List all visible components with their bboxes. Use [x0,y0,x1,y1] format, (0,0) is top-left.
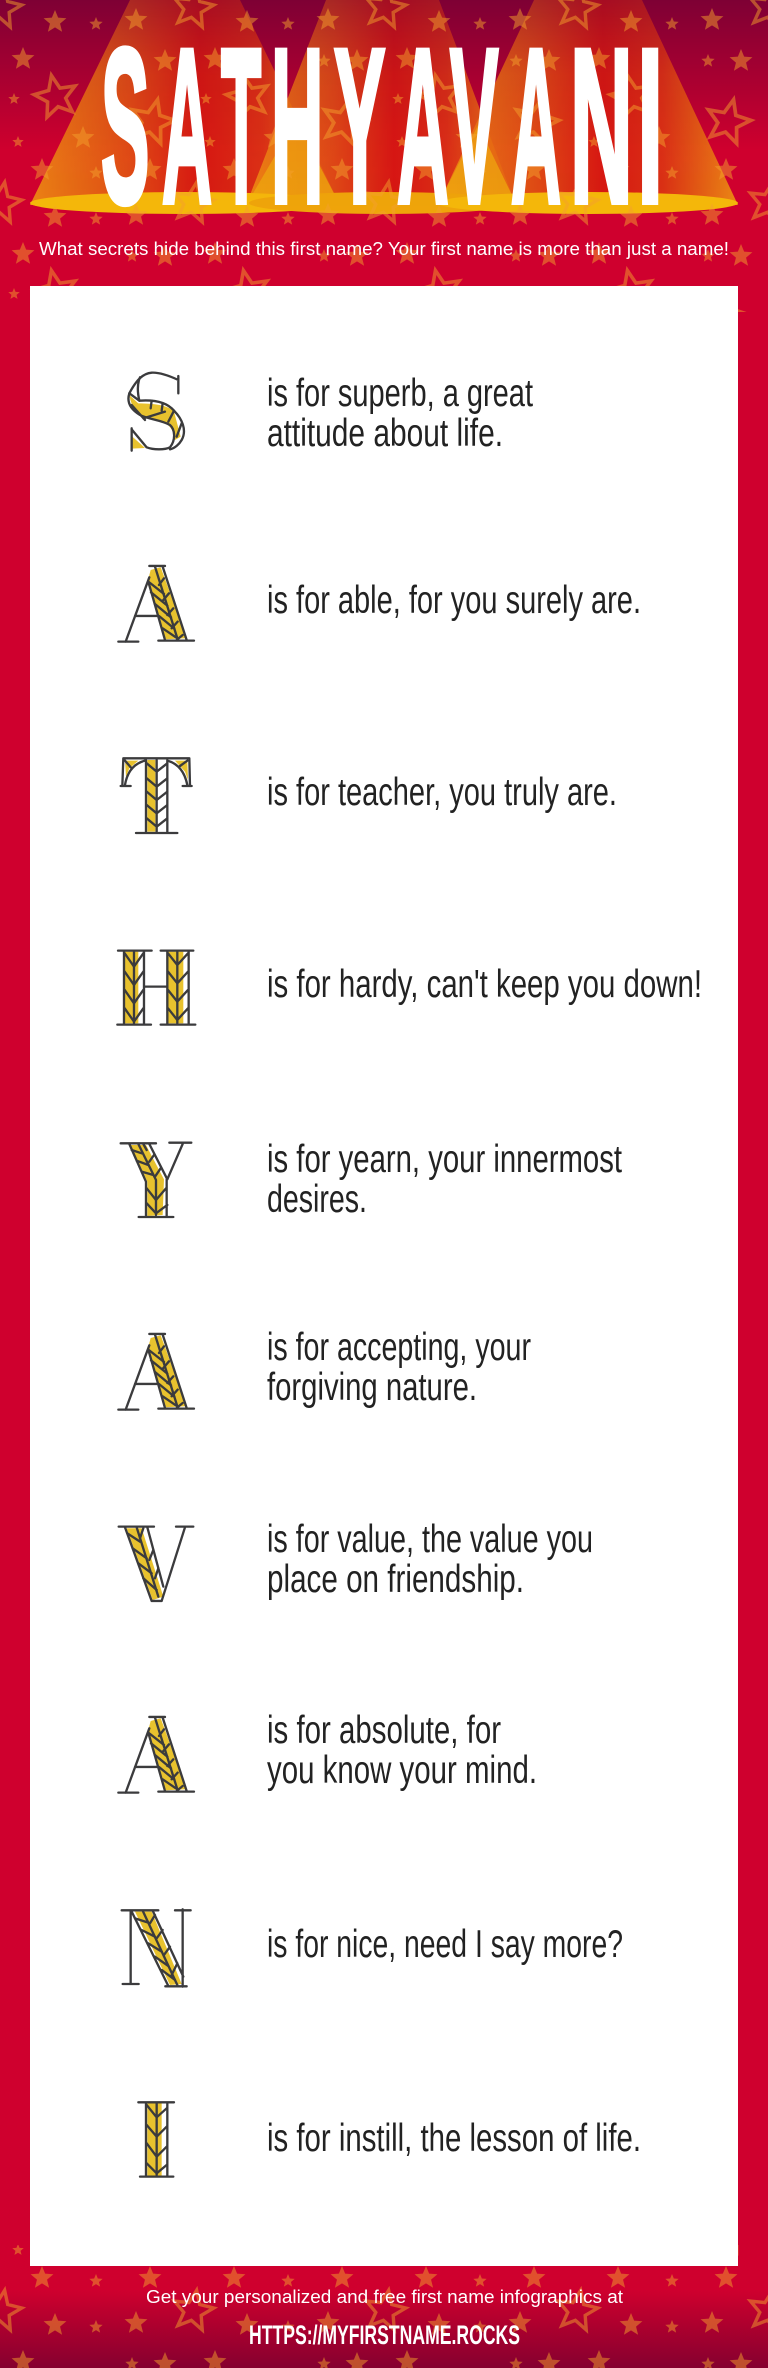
title: I [637,3,663,249]
spotlights [30,0,738,214]
row S [128,372,533,455]
title [101,2,663,249]
icon: letter A [118,566,194,642]
text: Y [267,1138,622,1221]
text: A3: you know your mind. [267,1749,537,1792]
title: A [162,2,212,249]
text: Y: desires. [267,1178,367,1221]
background: top gradient band [0,0,768,150]
icon: letter H [117,951,195,1025]
text: V: is for value, the value you [267,1518,593,1561]
row Y [121,1138,622,1221]
text: V [267,1518,593,1601]
icon: letter N [122,1909,191,1987]
title: V [450,3,498,249]
icon: letter T [121,758,192,833]
text: Y: is for yearn, your innermost [267,1138,622,1181]
icon: letter A [118,1717,194,1793]
title: A [397,3,449,249]
background: bottom star pattern [0,2245,768,2368]
footer url: HTTPS://MYFIRSTNAME.ROCKS [249,2320,520,2350]
text: A2: is for accepting, your [267,1326,531,1369]
row I [138,2102,641,2177]
text: A: is for able, for you surely are. [267,579,641,622]
title: T [221,4,261,249]
title: N [570,5,633,249]
icon: letter I [138,2102,174,2177]
text: A3 [267,1709,537,1792]
subtitle: What secrets hide behind this first name? Your first name is more than just a name! [39,238,729,259]
footer text: Get your personalized and free first name infographics at [146,2287,623,2307]
text: S: is for superb, a great [267,372,533,415]
icon: letter V [119,1527,193,1601]
text: N: is for nice, need I say more? [267,1923,623,1966]
title: Y [334,3,385,249]
title: A [511,2,561,249]
text: S: attitude about life. [267,412,503,455]
row V [119,1518,593,1601]
text: V: place on friendship. [267,1558,524,1601]
row A [118,566,641,642]
panel: white letter list [30,286,738,2266]
text: I: is for instill, the lesson of life. [267,2117,641,2160]
icon: letter Y [121,1143,191,1217]
background: bottom gradient band [0,2290,768,2368]
row A2 [118,1326,531,1410]
background: top star pattern [0,0,768,312]
row T [121,758,617,833]
title: S [101,3,149,249]
text: A2: forgiving nature. [267,1366,477,1409]
icon: letter S [128,373,184,451]
row N [122,1909,623,1987]
text: T: is for teacher, you truly are. [267,771,617,814]
text: S [267,372,533,455]
icon: letter A [118,1334,194,1410]
text: A2 [267,1326,531,1409]
row H [117,951,702,1025]
title: H [271,3,323,249]
text: A3: is for absolute, for [267,1709,501,1752]
row A3 [118,1709,537,1793]
